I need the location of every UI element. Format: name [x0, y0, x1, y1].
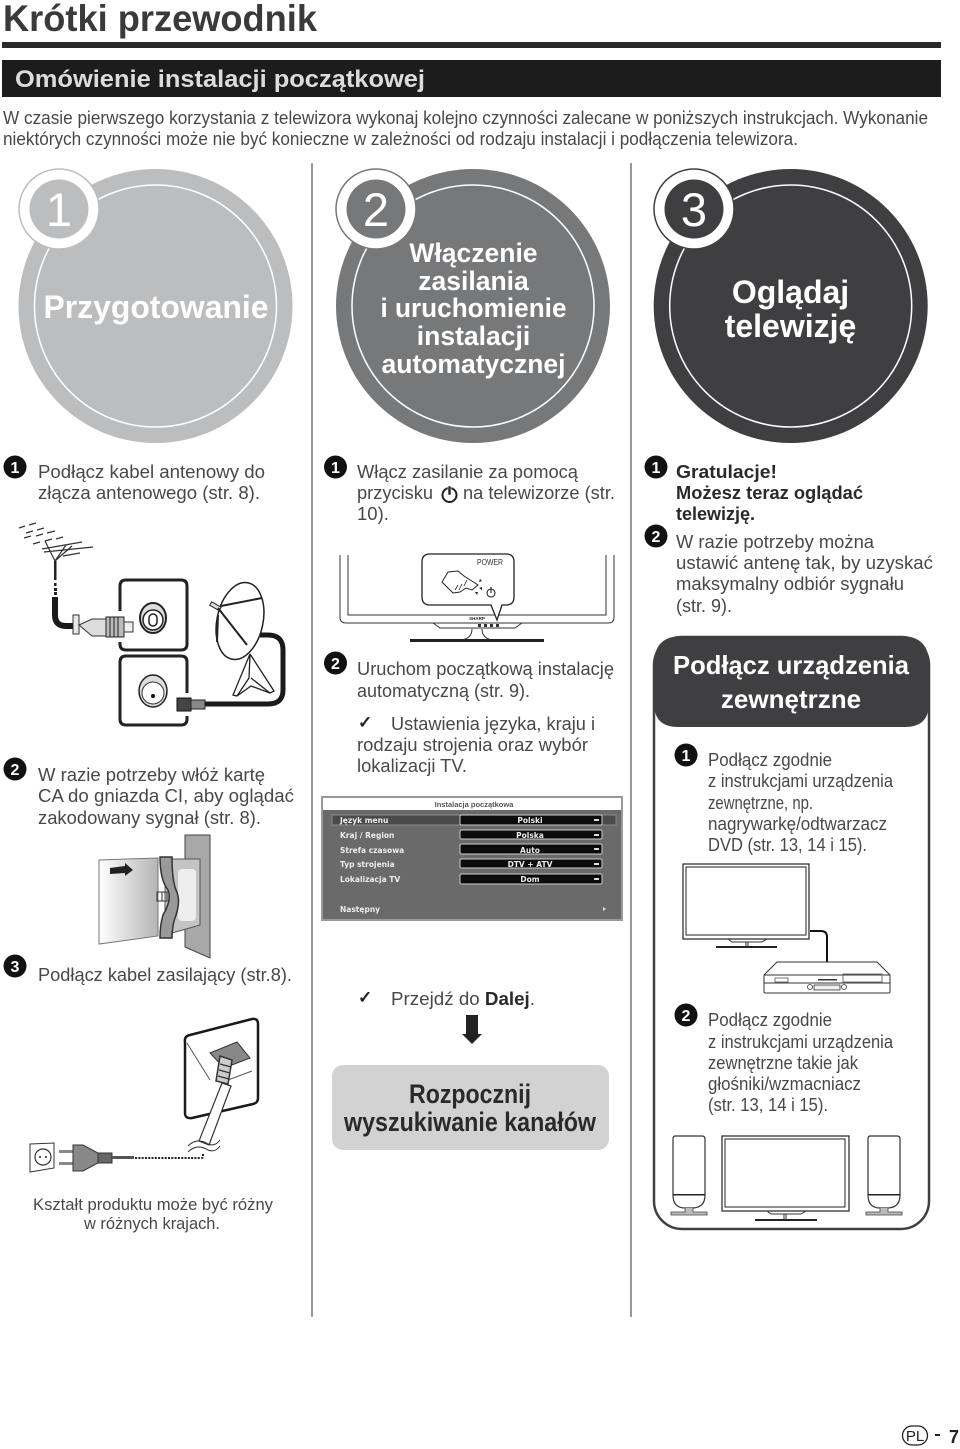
- panel step 2 text: z instrukcjami urządzenia: [708, 1031, 894, 1052]
- panel step 2 text: 2: [682, 1008, 691, 1025]
- setup menu screenshot: Lokalizacja TV: [340, 875, 400, 884]
- start channel search box: [332, 1065, 609, 1150]
- setup menu screenshot: Instalacja początkowa: [435, 800, 514, 809]
- panel step 2 text: zewnętrzne takie jak: [708, 1052, 859, 1073]
- column 2 step 2 text: Ustawienia języka, kraju i: [391, 713, 595, 734]
- column 2 next step text: Przejdź do Dalej.: [391, 988, 535, 1009]
- column 2 step 1 text: 10).: [357, 503, 389, 524]
- panel step 2 text: (str. 13, 14 i 15).: [708, 1094, 828, 1115]
- column 2 step 1 text: [324, 456, 615, 524]
- column 2 step 1 text: na telewizorze (str.: [463, 482, 615, 503]
- column 3 step 2 text: (str. 9).: [676, 595, 732, 616]
- column 2 step 1 text: przycisku: [357, 482, 433, 503]
- illustration: CA card: [99, 835, 210, 958]
- illustration: TV power button: POWER: [477, 557, 503, 567]
- column 3 step 1 text: 1: [652, 460, 661, 477]
- column 2 next step text: ✓: [358, 988, 372, 1007]
- title: [2, 0, 941, 48]
- illustration: antennas and sockets: [19, 523, 283, 725]
- column 1 step 3 text: 3: [11, 959, 20, 976]
- setup menu screenshot: [322, 797, 622, 920]
- column 2 step 2 text: rodzaju strojenia oraz wybór: [357, 734, 588, 755]
- column 3 step 2 text: ustawić antenę tak, by uzyskać: [676, 552, 933, 573]
- step 3 circle: Oglądaj telewizję: 3: [681, 183, 707, 236]
- panel header: zewnętrzne: [721, 684, 861, 714]
- column 1 step 3 text: [4, 954, 292, 985]
- panel step 2 text: [674, 1004, 894, 1115]
- step 3 circle: Oglądaj telewizję: Oglądaj: [732, 274, 849, 310]
- step 2 circle: Włączenie zasilania: 2: [363, 183, 389, 236]
- step 2 circle: Włączenie zasilania: instalacji: [417, 321, 530, 351]
- note: product shape: w różnych krajach.: [83, 1214, 220, 1233]
- arrow down: [462, 1015, 482, 1044]
- section heading bar: Omówienie instalacji początkowej: [15, 66, 425, 93]
- column 1 step 1 text: złącza antenowego (str. 8).: [38, 482, 260, 503]
- panel step 1 text: zewnętrzne, np.: [708, 792, 813, 813]
- panel step 1 text: 1: [682, 748, 691, 765]
- illustration: TV power button: SHARP: [469, 616, 485, 621]
- step 2 circle: Włączenie zasilania: [336, 169, 610, 443]
- panel header: [654, 636, 929, 727]
- step 1 circle: Przygotowanie: Przygotowanie: [44, 289, 268, 325]
- column 1 step 2 text: zakodowany sygnał (str. 8).: [38, 807, 261, 828]
- panel step 1 text: z instrukcjami urządzenia: [708, 770, 894, 791]
- column 1 step 3 text: Podłącz kabel zasilający (str.8).: [38, 964, 292, 985]
- intro text: [3, 107, 928, 149]
- page number: [902, 1426, 959, 1447]
- setup menu screenshot: Polski: [517, 816, 543, 825]
- illustration: TV and speakers: [671, 1136, 902, 1221]
- column 2 step 2 text: lokalizacji TV.: [357, 755, 467, 776]
- setup menu screenshot: Kraj / Region: [340, 831, 394, 840]
- note: product shape: Kształt produktu może być różny: [33, 1195, 273, 1214]
- column 3 step 1 text: [644, 456, 863, 524]
- column 2 step 2 text: 2: [331, 656, 340, 673]
- panel step 2 text: głośniki/wzmacniacz: [708, 1073, 861, 1094]
- illustration: TV power button: [340, 554, 614, 642]
- column 3 step 1 text: Gratulacje!: [676, 461, 777, 482]
- column 3 step 2 text: [644, 524, 933, 616]
- column 2 step 2 text: automatyczną (str. 9).: [357, 680, 530, 701]
- note: product shape: [33, 1195, 273, 1233]
- step 2 circle: Włączenie zasilania: Włączenie: [409, 238, 538, 268]
- column 1 step 1 text: 1: [11, 460, 20, 477]
- column 1 step 2 text: W razie potrzeby włóż kartę: [38, 764, 265, 785]
- setup menu screenshot: Auto: [520, 846, 540, 855]
- step 2 circle: Włączenie zasilania: zasilania: [418, 266, 529, 296]
- setup menu screenshot: Typ strojenia: [340, 860, 395, 869]
- panel step 1 text: [674, 744, 894, 855]
- section heading bar: [2, 60, 941, 97]
- column 3 step 1 text: Możesz teraz oglądać: [676, 482, 863, 503]
- column 1 step 2 text: 2: [11, 762, 20, 779]
- start channel search box: Rozpocznij: [409, 1079, 531, 1109]
- column 1 step 2 text: [4, 758, 294, 828]
- setup menu screenshot: Dom: [520, 875, 540, 884]
- panel step 1 text: nagrywarkę/odtwarzacz: [708, 813, 887, 834]
- start channel search box: wyszukiwanie kanałów: [343, 1107, 597, 1137]
- page number: PL: [906, 1428, 924, 1445]
- illustration: TV and DVD recorder: [683, 864, 890, 993]
- step 3 circle: Oglądaj telewizję: [654, 169, 928, 443]
- column 3 step 2 text: 2: [652, 529, 661, 546]
- step 2 circle: Włączenie zasilania: i uruchomienie: [380, 293, 566, 323]
- column 2 step 1 text: 1: [331, 460, 340, 477]
- intro text: niektórych czynności może nie być konieczne w zależności od rodzaju instalacji i podłączenia telewizora.: [3, 128, 798, 149]
- illustration: power cable and plug: [30, 1019, 258, 1172]
- column 3 step 2 text: W razie potrzeby można: [676, 531, 875, 552]
- panel step 1 text: Podłącz zgodnie: [708, 749, 832, 770]
- panel header: Podłącz urządzenia: [673, 650, 910, 680]
- column 2 step 1 text: Włącz zasilanie za pomocą: [357, 461, 579, 482]
- setup menu screenshot: Następny: [340, 905, 380, 914]
- setup menu screenshot: Strefa czasowa: [340, 846, 404, 855]
- setup menu screenshot: DTV + ATV: [508, 860, 553, 869]
- column 1 step 2 text: CA do gniazda CI, aby oglądać: [38, 785, 294, 806]
- step 1 circle: Przygotowanie: [18, 169, 292, 443]
- step 2 circle: Włączenie zasilania: automatycznej: [381, 349, 566, 379]
- column 2 step 2 text: ✓: [358, 713, 372, 732]
- panel step 1 text: DVD (str. 13, 14 i 15).: [708, 834, 867, 855]
- column 1 step 1 text: Podłącz kabel antenowy do: [38, 461, 265, 482]
- setup menu screenshot: Polska: [516, 831, 544, 840]
- column 2 step 2 text: Uruchom początkową instalację: [357, 658, 614, 679]
- panel: connect external devices: [654, 636, 929, 1229]
- column dividers: [312, 163, 631, 1317]
- panel step 2 text: Podłącz zgodnie: [708, 1009, 832, 1030]
- page number: 7: [949, 1427, 959, 1447]
- step 1 circle: Przygotowanie: 1: [46, 183, 72, 236]
- column 1 step 1 text: [4, 456, 265, 503]
- column 2 step 2 text: [324, 652, 614, 776]
- column 3 step 2 text: maksymalny odbiór sygnału: [676, 573, 904, 594]
- column 3 step 1 text: telewizję.: [676, 503, 755, 524]
- setup menu screenshot: Język menu: [339, 816, 388, 825]
- step 3 circle: Oglądaj telewizję: telewizję: [725, 308, 856, 344]
